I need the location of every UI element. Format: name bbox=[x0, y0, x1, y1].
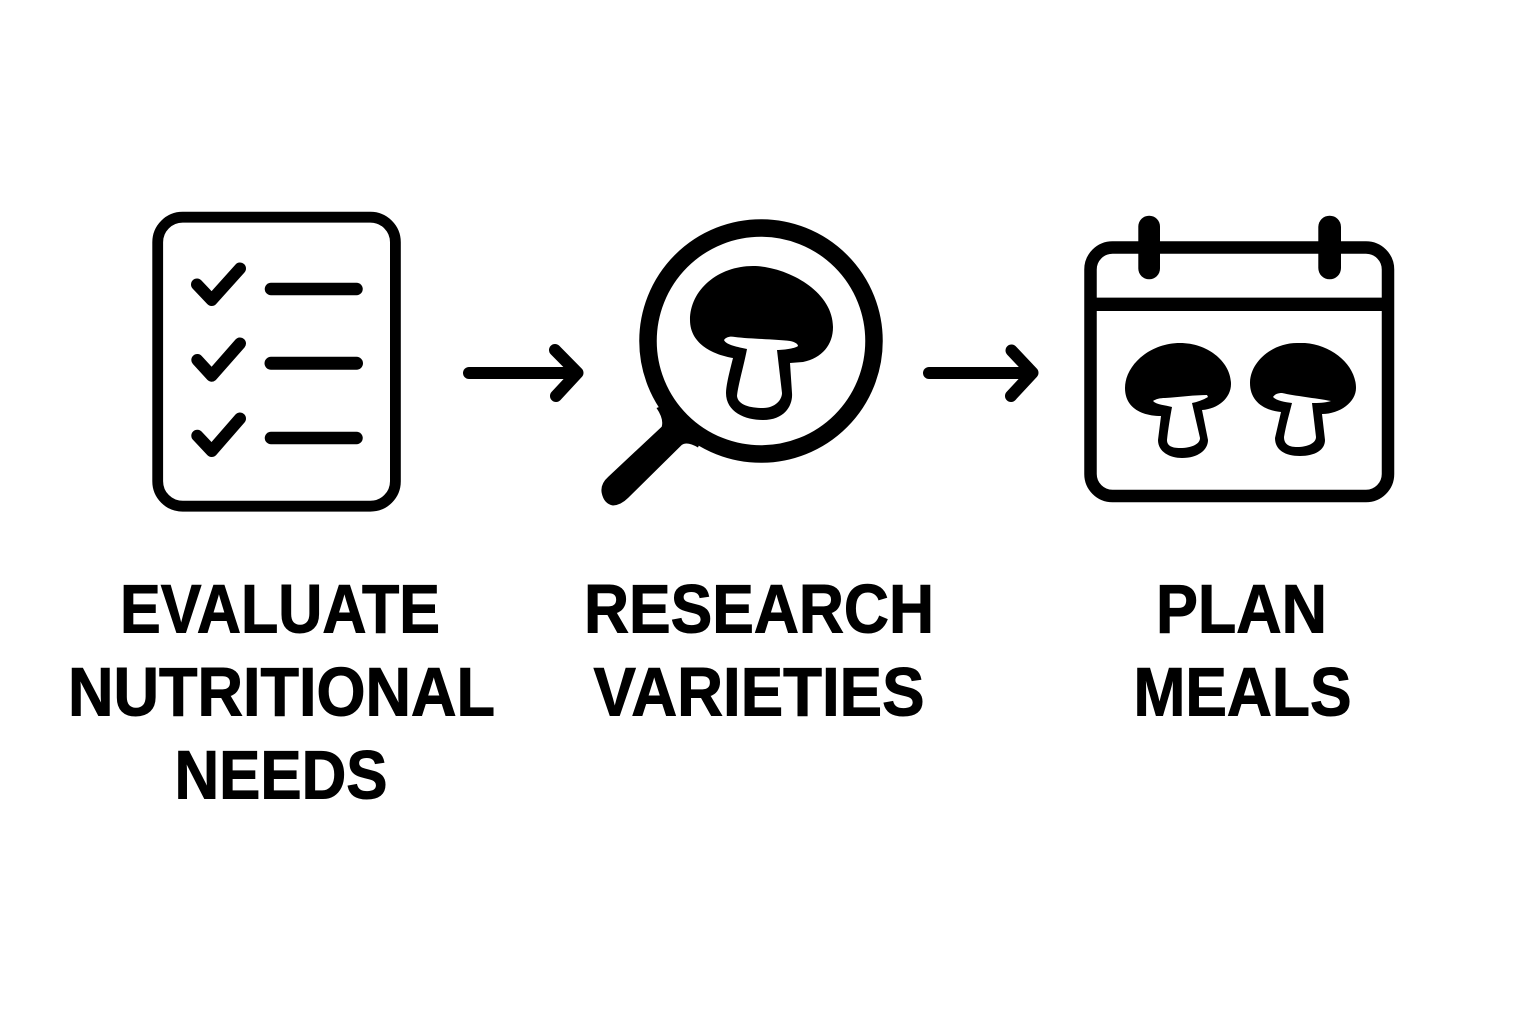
arrow: to research bbox=[469, 350, 578, 396]
label: plan meals: MEALS bbox=[1134, 654, 1352, 730]
label: plan meals bbox=[1134, 570, 1352, 730]
label: research varieties bbox=[584, 570, 934, 730]
icon: magnifying glass with mushroom bbox=[601, 228, 874, 506]
label: evaluate nutritional needs: NUTRITIONAL bbox=[68, 654, 495, 730]
label: plan meals: PLAN bbox=[1156, 570, 1327, 648]
label: research varieties: RESEARCH bbox=[584, 570, 934, 648]
label: evaluate nutritional needs: EVALUATE bbox=[120, 570, 440, 648]
label: evaluate nutritional needs bbox=[68, 570, 495, 814]
arrow: to plan bbox=[929, 350, 1032, 396]
icon: checklist bbox=[158, 217, 395, 506]
label: evaluate nutritional needs: NEEDS bbox=[174, 736, 388, 814]
icon: calendar with mushrooms bbox=[1090, 216, 1388, 496]
label: research varieties: VARIETIES bbox=[594, 654, 924, 730]
